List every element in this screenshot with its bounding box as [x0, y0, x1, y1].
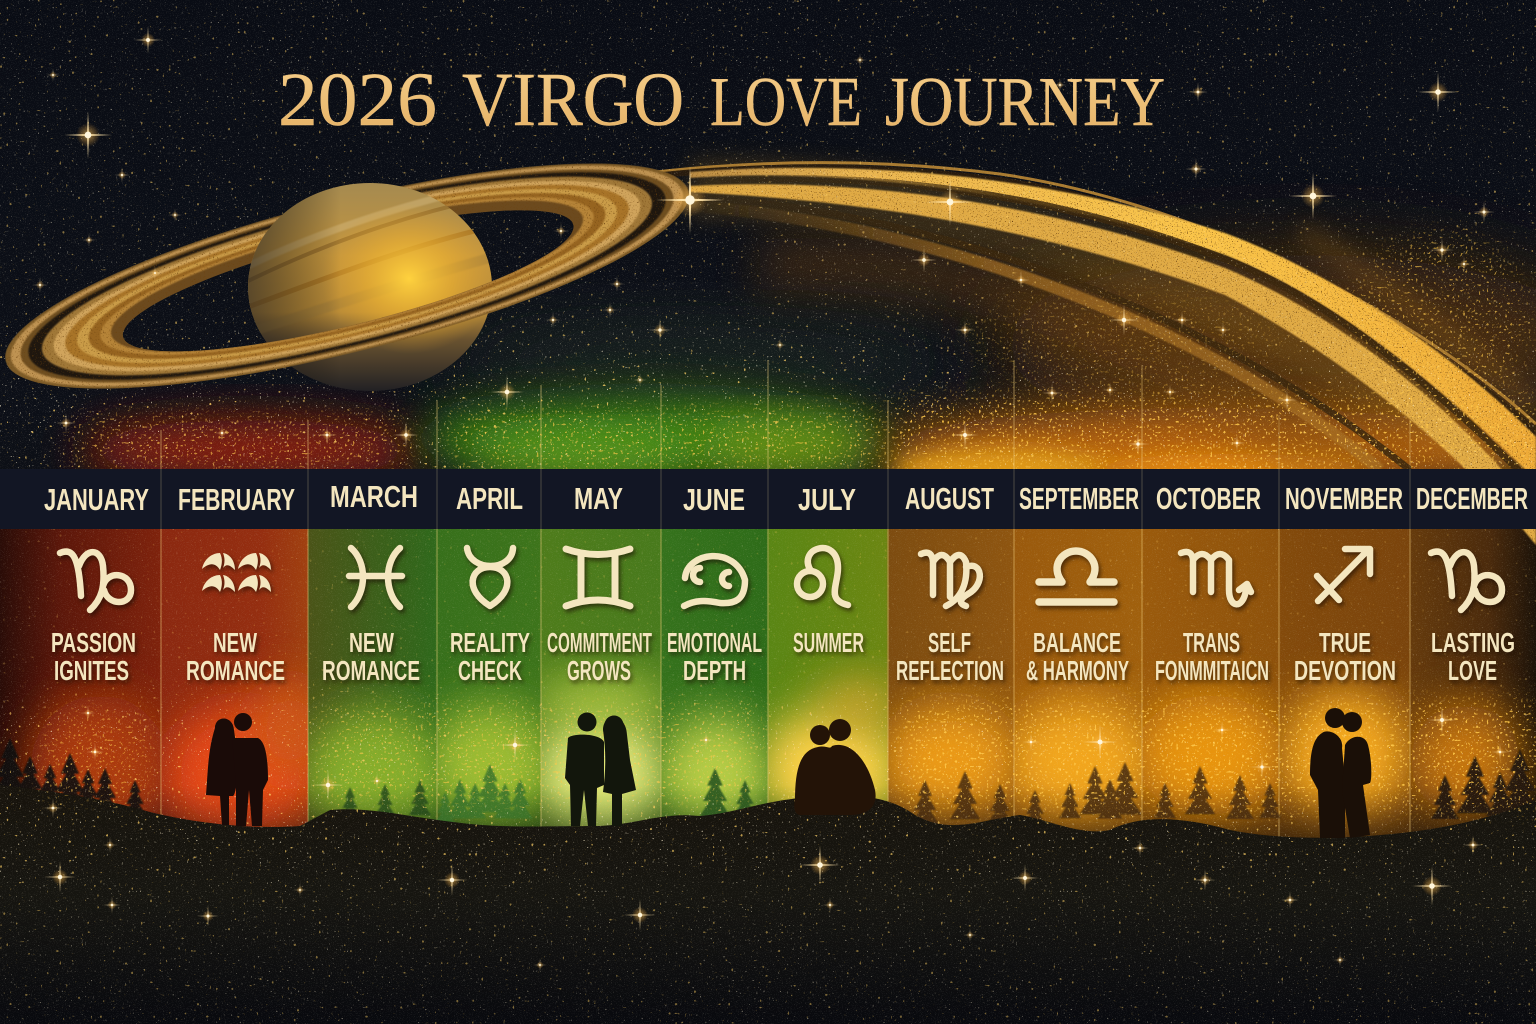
theme labels: NEW [213, 627, 257, 658]
couple: november [1310, 708, 1371, 838]
icon: leo [797, 548, 848, 605]
title: LOVE [710, 64, 862, 141]
month labels: JULY [798, 482, 856, 517]
theme labels: SELF [928, 627, 971, 658]
month labels: APRIL [456, 481, 523, 516]
theme labels: TRANS [1183, 627, 1240, 658]
month labels: NOVEMBER [1285, 481, 1403, 516]
title: JOURNEY [885, 64, 1165, 141]
tree line [0, 738, 1536, 825]
couple: may [565, 712, 636, 826]
theme labels: TRUE [1319, 627, 1371, 658]
icon: scorpio [1181, 552, 1251, 604]
theme labels: EMOTIONAL [667, 627, 762, 658]
icon: pisces [349, 548, 402, 607]
theme labels [51, 627, 1515, 686]
theme labels: DEVOTION [1294, 655, 1396, 686]
theme labels: REFLECTION [896, 655, 1004, 686]
month header bar [0, 469, 1536, 529]
month labels [44, 479, 1528, 517]
icon: sagittarius [1317, 549, 1370, 601]
icon: cancer [684, 556, 745, 606]
icon: taurus [467, 548, 513, 606]
month labels: JUNE [683, 482, 745, 517]
theme labels: IGNITES [54, 655, 129, 686]
nebula glow above timeline [80, 255, 1536, 492]
golden arc of the ring [470, 163, 1536, 545]
saturn rings, front [6, 194, 689, 389]
title [278, 58, 1165, 142]
theme labels: NEW [349, 627, 394, 658]
icon: gemini [566, 549, 630, 606]
theme labels: FONMMITAICN [1155, 655, 1269, 686]
icon: capricorn december [1431, 552, 1502, 610]
theme labels: LOVE [1448, 655, 1497, 686]
saturn planet [240, 183, 500, 391]
timeline color panels [0, 529, 1536, 838]
icon: capricorn [60, 552, 131, 610]
panel dividers [161, 360, 1410, 885]
theme labels: GROWS [567, 655, 631, 686]
theme labels: ROMANCE [322, 655, 420, 686]
couple: february [206, 713, 268, 826]
month labels: MARCH [330, 479, 418, 514]
theme labels: DEPTH [683, 655, 746, 686]
month labels: AUGUST [905, 481, 994, 516]
icon: libra [1039, 551, 1114, 602]
theme labels: & HARMONY [1026, 655, 1129, 686]
month labels: JANUARY [44, 482, 149, 517]
title: VIRGO [462, 58, 684, 142]
month labels: SEPTEMBER [1019, 481, 1139, 516]
month labels: MAY [574, 481, 623, 516]
month labels: OCTOBER [1156, 481, 1261, 516]
theme labels: SUMMER [793, 627, 864, 658]
theme labels: PASSION [51, 627, 136, 658]
icon: virgo [921, 553, 980, 606]
month labels: FEBRUARY [178, 482, 295, 517]
saturn rings, back [0, 117, 707, 435]
icon: aquarius [202, 553, 271, 592]
theme labels: COMMITMENT [547, 627, 652, 658]
hills silhouette [0, 785, 1536, 1024]
theme labels: REALITY [450, 627, 530, 658]
zodiac icons [60, 548, 1502, 610]
theme labels: ROMANCE [186, 655, 285, 686]
theme labels: BALANCE [1033, 627, 1121, 658]
couple: july [794, 719, 876, 815]
title: 2026 [278, 58, 437, 142]
theme labels: CHECK [458, 655, 522, 686]
